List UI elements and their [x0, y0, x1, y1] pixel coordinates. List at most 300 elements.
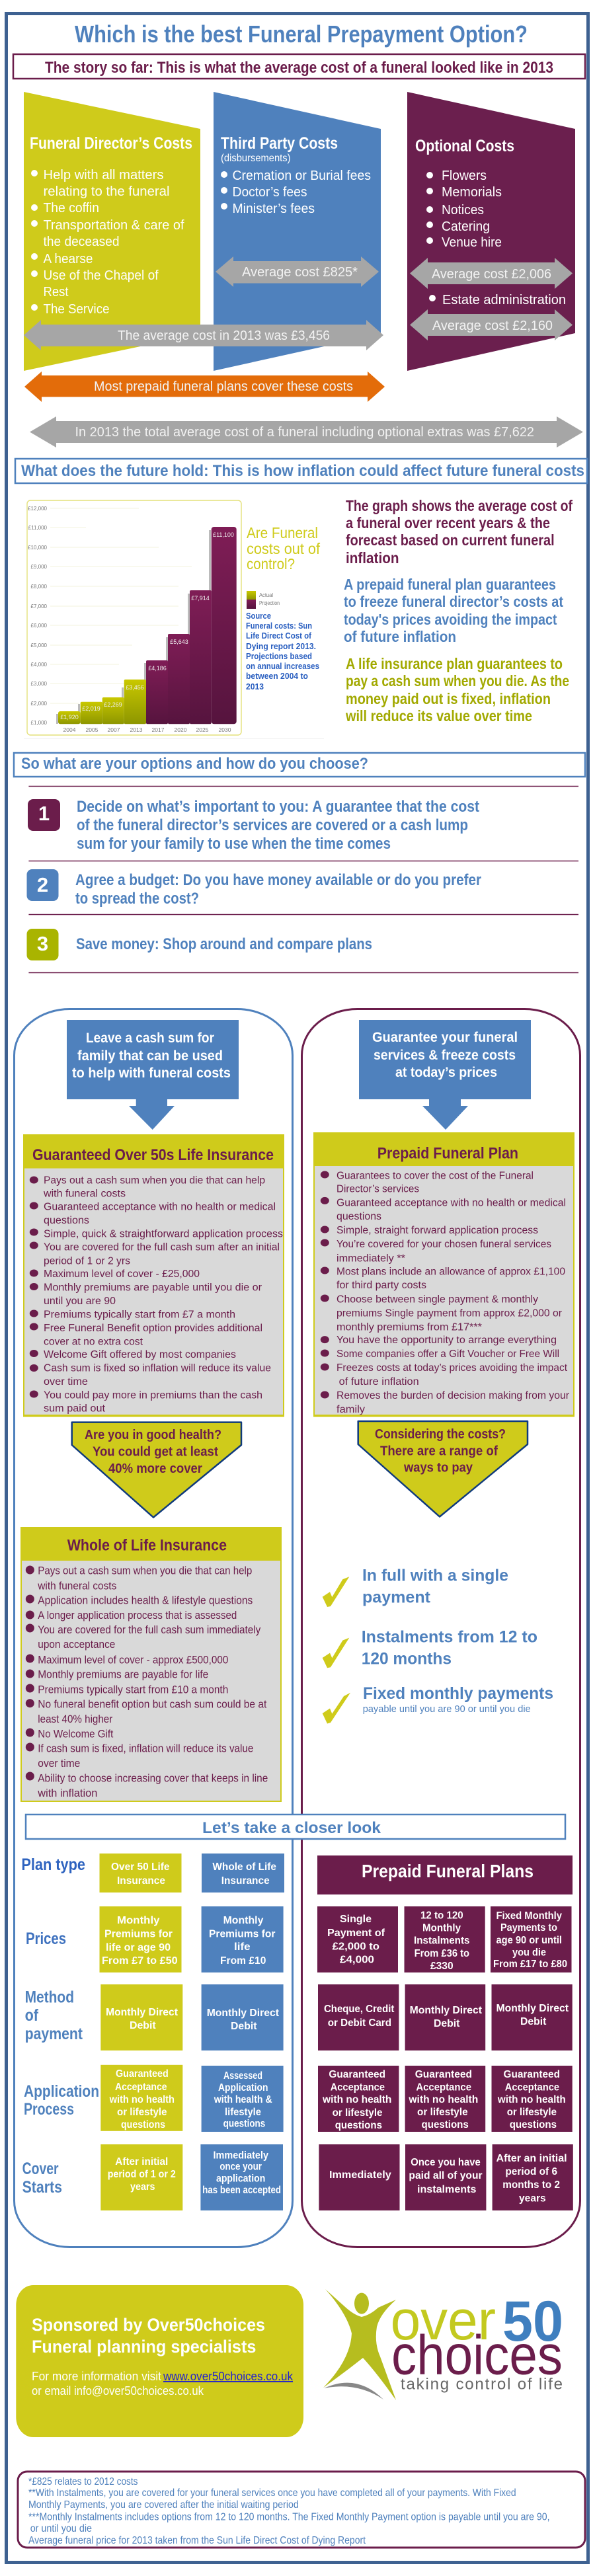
comparison row: prices: Monthly [117, 1915, 160, 1926]
arrow: average cost 2013 [24, 320, 383, 350]
chart source note: Funeral costs: Sun [246, 621, 312, 631]
comparison row: prices: Premiums for [104, 1929, 173, 1939]
arrow: average cost 2,160: Average cost £2,160 [432, 319, 553, 333]
comparison row: cover starts: Immediately [213, 2150, 268, 2162]
comparison row: application process [100, 2065, 573, 2132]
comparison row: prices: From £36 to [415, 1948, 469, 1959]
footnotes: **With Instalments, you are covered for your funeral services once you have completed all of your payments. With Fixed [28, 2487, 516, 2499]
comparison row: plan type: Whole of Life [212, 1861, 276, 1873]
panel: whole of life insurance: over time [38, 1757, 80, 1770]
comparison row: application process: or lifestyle [117, 2107, 167, 2118]
panel: optional costs: Venue hire [442, 235, 502, 250]
bar chart: funeral cost forecast: £1,920 [60, 714, 79, 721]
comparison row: plan type: Prepaid Funeral Plans [362, 1861, 534, 1881]
bar chart: funeral cost forecast: £2,000 [31, 701, 48, 707]
panel: prepaid funeral plan: You’re covered for your chosen funeral services [337, 1239, 551, 1250]
footnotes: or until you die [30, 2523, 92, 2534]
comparison row: cover starts: Immediately [329, 2169, 391, 2181]
panel: whole of life insurance: Application includes health & lifestyle questions [38, 1594, 253, 1606]
panel: guaranteed over 50s life insurance: Cash sum is fixed so inflation will reduce its value [44, 1363, 271, 1374]
arrow box: leave a cash sum: to help with funeral costs [72, 1066, 231, 1081]
comparison row: application process: questions [223, 2118, 265, 2130]
bar chart: funeral cost forecast: £3,456 [126, 684, 144, 691]
panel: funeral director's costs: the deceased [44, 235, 119, 249]
text block: life insurance guarantee [345, 655, 569, 724]
text block: the graph shows: a funeral over recent years & the [346, 514, 550, 531]
row labels: Starts [22, 2178, 62, 2197]
row labels: payment [25, 2025, 83, 2043]
step 2: 2 [37, 873, 48, 896]
panel: whole of life insurance: with funeral costs [37, 1579, 116, 1592]
arrow box: leave a cash sum [67, 1020, 239, 1130]
panel: guaranteed over 50s life insurance: over time [44, 1376, 88, 1387]
arrow box: guarantee your funeral [359, 1020, 531, 1130]
step 3: Save money: Shop around and compare plans [76, 935, 372, 953]
bar chart: funeral cost forecast: £3,000 [31, 681, 48, 687]
arrow: prepaid plans cover these costs: Most prepaid funeral plans cover these costs [94, 379, 353, 394]
comparison row: application process: with health & [214, 2094, 272, 2105]
panel outline: cash sum column [15, 1009, 292, 2247]
panel: whole of life insurance: If cash sum is fixed, inflation will reduce its value [38, 1742, 253, 1754]
panel: funeral director's costs: The coffin [44, 201, 99, 215]
panel: third party costs: Cremation or Burial fees [233, 169, 371, 183]
comparison row: cover starts: has been accepted [202, 2185, 281, 2196]
comparison row: prices: Premiums for [209, 1929, 275, 1939]
panel: prepaid funeral plan: monthly premiums from £17*** [337, 1321, 482, 1333]
panel: sponsor: Funeral planning specialists [32, 2337, 256, 2357]
row labels: Method [25, 1988, 74, 2007]
comparison row: method of payment: Debit [231, 2021, 257, 2032]
bar chart: funeral cost forecast: £7,000 [31, 604, 48, 609]
panel: whole of life insurance: Premiums typically start from £10 a month [38, 1683, 228, 1696]
panel: whole of life insurance: least 40% higher [38, 1713, 113, 1725]
payment option: fixed monthly: Fixed monthly payments [363, 1684, 553, 1703]
comparison row: application process: questions [510, 2119, 557, 2130]
comparison row: application process: Acceptance [416, 2082, 471, 2093]
panel: third party costs: Doctor’s fees [233, 185, 307, 200]
arrow box: guarantee your funeral: at today’s prices [395, 1065, 497, 1080]
comparison row: cover starts: Once you have [411, 2157, 481, 2168]
comparison row: cover starts: After initial [115, 2156, 168, 2167]
panel: prepaid funeral plan: for third party costs [337, 1280, 426, 1291]
comparison row: cover starts: period of 6 [505, 2166, 557, 2177]
comparison row: method of payment: Monthly Direct [106, 2007, 178, 2018]
chart source note: Source [246, 611, 271, 621]
bar chart: funeral cost forecast: £5,643 [170, 639, 188, 645]
panel: guaranteed over 50s life insurance: Maximum level of cover - £25,000 [44, 1268, 200, 1280]
panel: funeral director's costs: Funeral Director’s Costs [30, 134, 192, 153]
panel: funeral director's costs: Transportation & care of [44, 218, 184, 233]
row labels: Cover [22, 2160, 59, 2178]
comparison row: application process: Guaranteed [116, 2068, 169, 2080]
comparison row: plan type: Insurance [117, 1875, 165, 1887]
arrow: average cost 2013: The average cost in 2013 was £3,456 [118, 329, 330, 343]
comparison row: cover starts: After an initial [496, 2153, 567, 2164]
step 2: Agree a budget: Do you have money available or do you prefer [75, 871, 481, 889]
footnotes: Monthly Payments, you are covered after the initial waiting period [28, 2499, 299, 2511]
text block: the graph shows: forecast based on current funeral [346, 531, 555, 549]
comparison row: application process: Application [218, 2082, 268, 2093]
chart legend: Actual [259, 592, 273, 598]
panel: sponsor [16, 2285, 303, 2437]
text block: life insurance guarantee: money paid out is fixed, inflation [346, 690, 551, 707]
comparison row: method of payment: Debit [520, 2016, 547, 2027]
text block: the graph shows [346, 497, 573, 566]
step 1 [28, 798, 479, 853]
row labels: Application [24, 2082, 99, 2101]
panel: prepaid funeral plan: questions [337, 1211, 381, 1222]
payment option: fixed monthly: payable until you are 90 or until you die [363, 1703, 531, 1715]
bar chart: funeral cost forecast: 2007 [108, 726, 120, 733]
comparison row: method of payment: Monthly Direct [496, 2003, 569, 2014]
callout: considering the costs [358, 1421, 528, 1516]
panel: third party costs [214, 92, 381, 371]
bar chart: funeral cost forecast: 2030 [219, 726, 231, 733]
title: Which is the best Funeral Prepayment Option? [75, 20, 528, 48]
comparison row: application process: questions [422, 2119, 469, 2130]
arrow: total average cost: In 2013 the total average cost of a funeral including optional extras was £7,622 [75, 425, 534, 440]
arrow: average cost 2,160 [410, 309, 573, 340]
logo: over 50 choices: over [391, 2289, 496, 2351]
arrow: average cost 825: Average cost £825* [242, 265, 358, 280]
payment option: single payment: payment [362, 1588, 431, 1607]
comparison row: prices: Payments to [500, 1922, 557, 1933]
comparison row: prices: From £10 [220, 1955, 266, 1967]
bar chart: funeral cost forecast: 2025 [196, 726, 209, 733]
arrow box: guarantee your funeral: Guarantee your funeral [372, 1030, 518, 1045]
bar chart: funeral cost forecast: £9,000 [31, 564, 48, 570]
comparison row: application process: or lifestyle [333, 2107, 383, 2119]
panel: whole of life insurance: Maximum level of cover - approx £500,000 [38, 1653, 228, 1666]
comparison row: application process: with no health [408, 2094, 478, 2105]
panel: guaranteed over 50s life insurance: Guaranteed acceptance with no health or medical [44, 1202, 276, 1213]
comparison row: prices: life [234, 1941, 251, 1953]
bar chart: funeral cost forecast: 2020 [175, 726, 187, 733]
bar chart: funeral cost forecast: £11,000 [28, 525, 48, 531]
footnotes [18, 2472, 585, 2548]
callout: considering the costs: ways to pay [403, 1461, 473, 1475]
comparison row: application process: or lifestyle [417, 2107, 468, 2118]
comparison row: prices: Monthly [223, 1915, 263, 1926]
comparison row: cover starts [100, 2144, 573, 2210]
panel outline: funeral plan column [301, 1009, 580, 2247]
payment option: fixed monthly [323, 1684, 553, 1724]
comparison row: prices [99, 1906, 571, 1972]
panel: guaranteed over 50s life insurance: until you are 90 [44, 1296, 116, 1307]
callout: considering the costs: There are a range of [380, 1444, 498, 1459]
text block: prepaid plan guarantee [344, 576, 563, 645]
callout: are you in good health: 40% more cover [108, 1462, 202, 1476]
panel: prepaid funeral plan: premiums Single payment from approx £2,000 or [337, 1308, 562, 1319]
bar chart: funeral cost forecast: £2,269 [104, 701, 122, 708]
comparison row: prices: From £17 to £80 [493, 1959, 567, 1970]
panel: prepaid funeral plan: of future inflation [339, 1376, 419, 1387]
footnotes: *£825 relates to 2012 costs [28, 2476, 138, 2487]
panel: third party costs: Third Party Costs [221, 134, 338, 153]
comparison row: prices: 12 to 120 [420, 1910, 463, 1921]
panel: prepaid funeral plan [313, 1132, 575, 1417]
panel: funeral director's costs: Help with all matters [44, 168, 164, 182]
heading: let's take a closer look: Let’s take a closer look [202, 1819, 381, 1837]
comparison row: cover starts: application [216, 2173, 265, 2184]
bar chart: funeral cost forecast: 2013 [130, 726, 143, 733]
comparison row: cover starts: once your [219, 2162, 262, 2173]
bar chart: funeral cost forecast: 2017 [152, 726, 165, 733]
panel: whole of life insurance: upon acceptance [38, 1638, 115, 1651]
logo: over 50 choices: 50 [502, 2290, 563, 2353]
callout: are you in good health [72, 1423, 241, 1518]
comparison row: application process: Acceptance [115, 2082, 167, 2093]
row labels: Process [24, 2100, 74, 2119]
comparison row: prices: £330 [430, 1961, 454, 1972]
callout: are you in good health: You could get at least [93, 1445, 218, 1460]
heading: let's take a closer look [26, 1815, 565, 1839]
panel: sponsor: For more information visit [32, 2370, 161, 2383]
panel: prepaid funeral plan: Director’s services [337, 1184, 419, 1195]
panel: sponsor: or email info@over50choices.co.uk [32, 2384, 204, 2398]
comparison row: cover starts: months to 2 [502, 2179, 560, 2191]
chart source note [246, 611, 319, 691]
comparison row: method of payment: Debit [434, 2018, 460, 2029]
payment option: instalments [323, 1627, 537, 1668]
comparison row: application process: questions [335, 2120, 382, 2131]
logo: over 50 choices: choices [391, 2324, 563, 2386]
chart source note: Projections based [246, 651, 312, 661]
panel: funeral director's costs [24, 92, 200, 371]
row labels: of [25, 2006, 39, 2025]
comparison row: prices: Payment of [327, 1928, 385, 1939]
step 1: sum for your family to use when the time comes [77, 835, 391, 853]
chart title: are funeral costs out of control: Are Funeral [247, 524, 318, 541]
panel: optional costs: Memorials [442, 185, 502, 200]
panel: prepaid funeral plan: Some companies offer a Gift Voucher or Free Will [337, 1348, 559, 1360]
row labels: Plan type [21, 1855, 85, 1874]
chart source note: on annual increases [246, 661, 319, 671]
text block: life insurance guarantee: A life insurance plan guarantees to [346, 655, 563, 672]
comparison row: application process: lifestyle [225, 2107, 261, 2118]
bar chart: funeral cost forecast [24, 500, 324, 739]
panel: guaranteed over 50s life insurance: Monthly premiums are payable until you die or [44, 1282, 262, 1294]
comparison row: prices: age 90 or until [496, 1935, 562, 1946]
panel: whole of life insurance: No Welcome Gift [38, 1727, 114, 1740]
arrow box: guarantee your funeral: services & freeze costs [374, 1048, 516, 1063]
bar chart: funeral cost forecast: £8,000 [31, 584, 48, 590]
panel: funeral director's costs: Rest [44, 285, 69, 299]
comparison row: method of payment: Monthly Direct [207, 2008, 280, 2019]
comparison row: prices: £2,000 to [333, 1941, 379, 1953]
comparison row: application process: with no health [497, 2094, 566, 2105]
comparison row: prices: Fixed Monthly [496, 1910, 562, 1922]
panel: optional costs: Estate administration [442, 293, 566, 307]
panel: guaranteed over 50s life insurance: cover at no extra cost [44, 1336, 143, 1347]
panel: guaranteed over 50s life insurance: questions [44, 1215, 89, 1226]
payment option: instalments: Instalments from 12 to [362, 1627, 537, 1646]
row labels: Prices [26, 1930, 66, 1948]
panel: sponsor: www.over50choices.co.uk [163, 2370, 294, 2383]
step 3 [26, 929, 372, 960]
comparison row: prices: Monthly [422, 1922, 461, 1933]
panel: whole of life insurance: Ability to choose increasing cover that keeps in line [38, 1772, 268, 1784]
bar chart: funeral cost forecast: £6,000 [31, 623, 48, 629]
panel: prepaid funeral plan: Most plans include an allowance of approx £1,100 [337, 1267, 565, 1278]
chart legend: Projection [259, 600, 280, 606]
panel: guaranteed over 50s life insurance: You are covered for the full cash sum after an initial [44, 1241, 280, 1253]
chart title: are funeral costs out of control: control? [247, 555, 295, 572]
panel: prepaid funeral plan: immediately ** [337, 1253, 405, 1264]
panel: whole of life insurance: A longer application process that is assessed [38, 1609, 237, 1621]
comparison row: plan type [99, 1854, 573, 1894]
panel: whole of life insurance: You are covered for the full cash sum immediately [38, 1623, 261, 1636]
comparison row: cover starts: years [519, 2193, 546, 2204]
comparison row: method of payment: or Debit Card [328, 2017, 391, 2029]
panel: whole of life insurance: Whole of Life Insurance [67, 1537, 227, 1555]
heading: so what are your options: So what are your options and how do you choose? [21, 755, 368, 773]
panel: guaranteed over 50s life insurance: Pays out a cash sum when you die that can help [44, 1175, 265, 1186]
panel: prepaid funeral plan: family [337, 1404, 365, 1415]
bar chart: funeral cost forecast: 2004 [63, 726, 76, 733]
arrow: average cost 825 [216, 256, 379, 287]
panel: prepaid funeral plan: Prepaid Funeral Plan [377, 1145, 518, 1163]
panel: prepaid funeral plan: Removes the burden of decision making from your [337, 1390, 569, 1401]
step 2: to spread the cost? [75, 890, 199, 908]
comparison row: prices: life or age 90 [106, 1942, 171, 1953]
comparison row: cover starts: instalments [417, 2184, 476, 2195]
comparison row: application process: or lifestyle [507, 2107, 557, 2118]
comparison row: plan type: Insurance [221, 1875, 270, 1887]
panel: prepaid funeral plan: Guaranteed acceptance with no health or medical [337, 1198, 566, 1209]
panel: optional costs: Catering [442, 219, 490, 234]
panel: optional costs [407, 92, 575, 371]
heading: so what are your options [14, 753, 585, 777]
panel: whole of life insurance: Pays out a cash sum when you die that can help [38, 1565, 252, 1577]
bar chart: funeral cost forecast: £12,000 [28, 506, 48, 512]
text block: prepaid plan guarantee: of future inflation [344, 628, 456, 645]
bar chart: funeral cost forecast: £11,100 [213, 531, 234, 538]
bar chart: funeral cost forecast: 2005 [86, 726, 99, 733]
text block: life insurance guarantee: will reduce its value over time [345, 707, 532, 724]
step 1: 1 [38, 802, 50, 825]
panel: prepaid funeral plan: Choose between single payment & monthly [337, 1294, 538, 1305]
arrow: prepaid plans cover these costs [24, 371, 385, 402]
comparison row: application process: Acceptance [331, 2082, 385, 2093]
panel: funeral director's costs: Use of the Chapel of [44, 268, 159, 283]
panel: funeral director's costs: A hearse [44, 252, 93, 266]
comparison row: method of payment: Debit [130, 2020, 156, 2031]
panel: prepaid funeral plan: Guarantees to cover the cost of the Funeral [337, 1170, 534, 1181]
panel: guaranteed over 50s life insurance: Guaranteed Over 50s Life Insurance [32, 1146, 274, 1164]
panel: guaranteed over 50s life insurance: with funeral costs [43, 1188, 126, 1199]
panel: third party costs: (disbursements) [221, 153, 291, 164]
bar chart: funeral cost forecast: £4,000 [31, 662, 48, 668]
chart legend [247, 591, 280, 609]
callout: considering the costs: Considering the costs? [375, 1427, 506, 1442]
chart source note: Life Direct Cost of [246, 631, 312, 641]
bar chart: funeral cost forecast: £2,019 [82, 705, 100, 712]
arrow: average cost 2,006 [410, 258, 573, 289]
logo: over 50 choices [323, 2289, 563, 2400]
panel: optional costs: Optional Costs [415, 137, 514, 155]
panel: guaranteed over 50s life insurance [23, 1134, 284, 1417]
panel: third party costs: Minister’s fees [233, 202, 315, 216]
payment option: single payment [323, 1567, 508, 1607]
panel: guaranteed over 50s life insurance: Welcome Gift offered by most companies [44, 1349, 236, 1360]
step 3: 3 [37, 932, 48, 955]
comparison row: method of payment [100, 1984, 573, 2050]
panel: guaranteed over 50s life insurance: You could pay more in premiums than the cash [44, 1389, 262, 1401]
panel: whole of life insurance [20, 1527, 282, 1802]
comparison row: application process: Guaranteed [415, 2069, 472, 2080]
heading: the story so far [13, 54, 585, 79]
text block: the graph shows: inflation [346, 549, 399, 566]
comparison row: prices: £4,000 [340, 1955, 374, 1966]
panel: whole of life insurance: Monthly premiums are payable for life [38, 1668, 208, 1680]
comparison row: prices: From £7 to £50 [102, 1955, 178, 1967]
chart title: are funeral costs out of control: costs out of [247, 540, 321, 557]
bar chart: funeral cost forecast: £10,000 [28, 545, 48, 551]
comparison row: cover starts: paid all of your [409, 2170, 483, 2181]
text block: prepaid plan guarantee: A prepaid funeral plan guarantees [344, 576, 556, 593]
bar chart: funeral cost forecast: £4,186 [148, 665, 167, 672]
panel: prepaid funeral plan: Simple, straight forward application process [337, 1225, 538, 1236]
payment option: instalments: 120 months [362, 1649, 452, 1668]
arrow: total average cost [30, 416, 583, 448]
comparison row: application process: Guaranteed [504, 2069, 560, 2080]
bar chart: funeral cost forecast: £5,000 [31, 643, 48, 648]
comparison row: method of payment: Monthly Direct [410, 2005, 483, 2016]
chart title: are funeral costs out of control [247, 524, 321, 572]
step 1: Decide on what’s important to you: A guarantee that the cost [77, 798, 479, 816]
panel: funeral director's costs: The Service [44, 302, 110, 317]
footnotes: Average funeral price for 2013 taken from the Sun Life Direct Cost of Dying Report [28, 2535, 366, 2546]
arrow box: leave a cash sum: family that can be used [77, 1048, 223, 1064]
comparison row: plan type: Over 50 Life [111, 1861, 170, 1873]
comparison row: cover starts: period of 1 or 2 [108, 2169, 176, 2180]
comparison row: application process: questions [121, 2119, 165, 2130]
comparison row: application process: with no health [109, 2094, 175, 2105]
chart source note: 2013 [246, 682, 264, 691]
comparison row: prices: Instalments [414, 1935, 470, 1946]
panel: prepaid funeral plan: Freezes costs at today’s prices avoiding the impact [337, 1362, 568, 1374]
chart source note: Dying report 2013. [246, 641, 316, 651]
text block: prepaid plan guarantee: today's prices avoiding the impact [344, 611, 557, 628]
arrow: average cost 2,006: Average cost £2,006 [432, 267, 551, 282]
comparison row: application process: with no health [322, 2094, 391, 2105]
panel: funeral director's costs: relating to the funeral [44, 184, 169, 199]
panel: sponsor: Sponsored by Over50choices [32, 2315, 265, 2335]
comparison row: application process: Guaranteed [329, 2069, 385, 2080]
comparison row: cover starts: years [130, 2181, 155, 2193]
panel: guaranteed over 50s life insurance: sum paid out [44, 1403, 106, 1414]
panel: guaranteed over 50s life insurance: Simple, quick & straightforward application process [44, 1228, 283, 1240]
step 1: of the funeral director’s services are covered or a cash lump [77, 816, 468, 834]
arrow box: leave a cash sum: Leave a cash sum for [86, 1031, 214, 1046]
panel: whole of life insurance: No funeral benefit option but cash sum could be at [38, 1698, 267, 1710]
panel: optional costs: Flowers [442, 169, 487, 183]
payment option: single payment: In full with a single [362, 1567, 508, 1585]
comparison row: method of payment: Cheque, Credit [324, 2004, 395, 2015]
text block: prepaid plan guarantee: to freeze funeral director’s costs at [344, 593, 563, 610]
row labels [21, 1855, 99, 2197]
comparison row: prices: you die [512, 1947, 546, 1959]
bar chart: funeral cost forecast: £1,000 [31, 720, 48, 726]
comparison row: prices: Single [340, 1914, 372, 1925]
panel: guaranteed over 50s life insurance: Premiums typically start from £7 a month [44, 1309, 235, 1321]
comparison row: application process: Acceptance [505, 2082, 559, 2093]
callout: are you in good health: Are you in good health? [85, 1428, 221, 1442]
step 2 [26, 869, 481, 908]
panel: guaranteed over 50s life insurance: period of 1 or 2 yrs [44, 1255, 130, 1267]
panel: guaranteed over 50s life insurance: Free Funeral Benefit option provides additional [44, 1323, 262, 1334]
